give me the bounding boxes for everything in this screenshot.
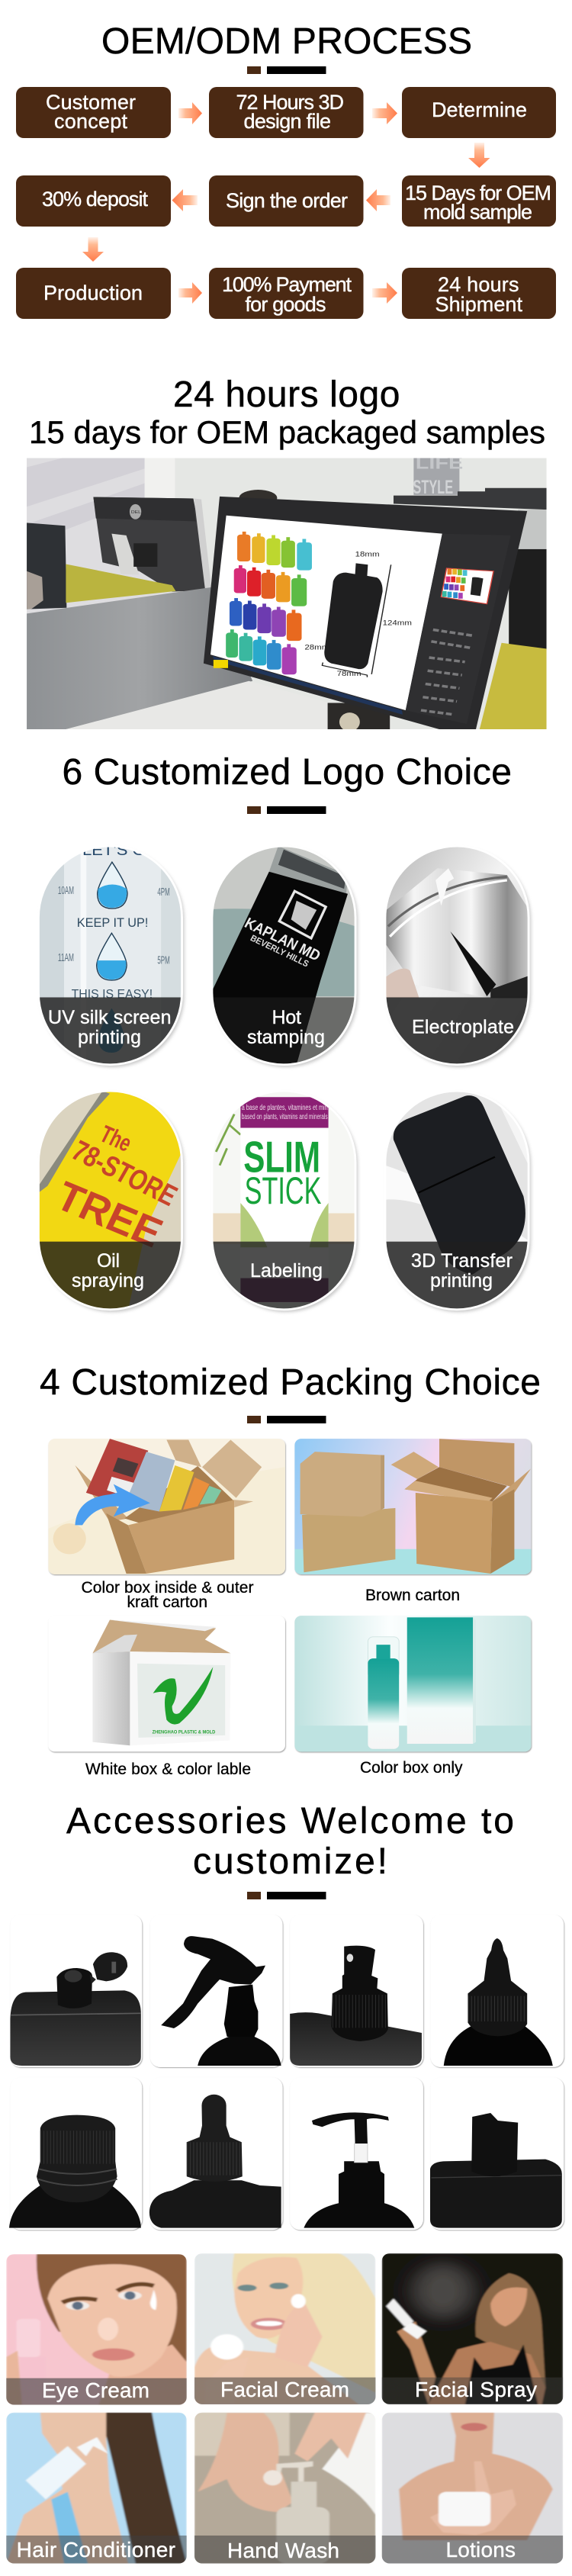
step: customer concept: [16, 87, 171, 138]
logo choices grid: [38, 841, 531, 1312]
label: oil spraying: spraying: [72, 1270, 144, 1291]
caption: white box and color label: White box & color lable: [85, 1761, 251, 1778]
label: oil spraying: [72, 1250, 144, 1291]
heading: 4 customized packing choice: 4 Customized Packing Choice: [40, 1362, 541, 1403]
label: 3D transfer printing: 3D Transfer: [411, 1250, 513, 1272]
use-case photo grid: [6, 2253, 563, 2564]
accessory: dropper: [149, 2077, 283, 2230]
label: hot stamping: stamping: [247, 1027, 325, 1048]
heading: 15 days for OEM packaged samples: 15 days for OEM packaged samples: [29, 414, 545, 450]
thumbnail panel: [441, 568, 493, 604]
heading accent bars: [247, 66, 326, 74]
pill outlines: [38, 846, 529, 1310]
photo: lotions: [382, 2413, 563, 2564]
photo: designer monitor showing colored bottles: STYLE: [413, 477, 453, 498]
arrow: sign to deposit: [172, 189, 198, 211]
photo: facial spray: [382, 2253, 563, 2404]
card: brown carton: [294, 1439, 531, 1574]
caption: color box inside and outer kraft carton: Color box inside & outer: [81, 1579, 253, 1597]
label: UV silk screen printing: printing: [78, 1027, 141, 1048]
pill image: labeled slim stick: STICK: [245, 1170, 322, 1213]
label: hand wash: Hand Wash: [227, 2539, 339, 2562]
label: UV silk screen printing: UV silk screen: [48, 1007, 171, 1028]
photo: facial cream: [194, 2253, 375, 2404]
accessory: lotion pump: [290, 2077, 423, 2230]
step: 72 hours 3D design file: 72 Hours 3D: [236, 91, 344, 114]
black bottle with dimensions: 18mm: [355, 551, 380, 558]
step: 15 days for OEM mold sample: [402, 175, 556, 227]
label: eye cream: Eye Cream: [42, 2378, 149, 2402]
accessory: twist nozzle: [430, 1915, 564, 2067]
label: electroplate: Electroplate: [412, 1016, 514, 1037]
photo: hair conditioner: [6, 2413, 187, 2564]
black bottle with dimensions: 28mm: [304, 645, 329, 651]
step: sign the order: Sign the order: [226, 189, 348, 212]
step: 30% deposit: [16, 175, 171, 227]
label: lotions: Lotions: [445, 2538, 516, 2562]
caption: brown carton: Brown carton: [365, 1587, 460, 1604]
arrow: production to payment: [178, 282, 202, 304]
pill image: UV silk screen bottle: KEEP IT UP!: [77, 915, 148, 930]
step: 15 days for OEM mold sample: 15 Days for OEM: [405, 182, 551, 204]
step: production: [16, 268, 171, 319]
heading: accessories welcome to customize: [66, 1801, 514, 1882]
pill image: 3D transfer black cap: [385, 1091, 529, 1310]
heading: accessories welcome to customize: Accessories Welcome to: [66, 1801, 514, 1841]
accessory: fine mist sprayer: [290, 1915, 423, 2067]
caption: color box only: Color box only: [360, 1759, 463, 1777]
arrow: design to determine: [372, 102, 397, 124]
step: customer concept: Customer: [46, 91, 136, 114]
step: production: Production: [43, 281, 143, 304]
label: UV silk screen printing: [48, 1007, 171, 1048]
caption: color box inside and outer kraft carton: kraft carton: [127, 1594, 207, 1611]
layers panel rows: [421, 630, 472, 715]
pill image: hot stamped black bottle: KAPLAN MD: [242, 915, 323, 964]
label: facial cream: Facial Cream: [220, 2378, 349, 2401]
step: 72 hours 3D design file: design file: [244, 110, 331, 133]
packing choices grid: [48, 1439, 531, 1778]
card: white box with color label: ZHENGHAO PLASTIC & MOLD: [153, 1730, 216, 1735]
black bottle with dimensions: 124mm: [383, 620, 412, 627]
heading accent bars: [247, 1416, 326, 1423]
process flow chart: [16, 87, 556, 319]
heading: 24 hours logo: 24 hours logo: [173, 375, 400, 415]
step: 72 hours 3D design file: [209, 87, 363, 138]
label: labeling: Labeling: [250, 1260, 323, 1282]
heading accent bars: [247, 1892, 326, 1899]
accessory: flip top cap: [10, 1915, 142, 2067]
heading: 6 customized logo choice: 6 Customized Logo Choice: [63, 752, 512, 793]
arrow: determine to mold sample: [468, 143, 490, 168]
arrow: payment to shipment: [372, 282, 397, 304]
label: facial spray: Facial Spray: [415, 2378, 537, 2401]
arrow: concept to design: [178, 102, 202, 124]
step: 15 days for OEM mold sample: mold sample: [423, 201, 532, 224]
label: oil spraying: Oil: [97, 1250, 120, 1272]
photo: eye cream: [6, 2254, 187, 2405]
pill image: UV silk screen bottle: 11AM: [58, 952, 74, 964]
photo: designer monitor showing colored bottles: [27, 452, 547, 732]
pill image: UV silk screen bottle: THIS IS EASY!: [72, 986, 153, 1001]
pill image: labeled slim stick: à base de plantes, vitamines et min: [242, 1105, 328, 1112]
caption: color box inside and outer kraft carton: [81, 1579, 253, 1611]
heading accent bars: [247, 806, 326, 814]
step: 24 hours shipment: 24 hours: [438, 273, 519, 296]
pill image: labeled slim stick: SLIM: [243, 1133, 320, 1182]
pill image: oil sprayed yellow bottle: TREE: [50, 1172, 169, 1256]
pill image: UV silk screen bottle: LET'S GO!: [82, 841, 163, 859]
photo: designer monitor showing colored bottles: DELL: [131, 510, 144, 515]
pill image: oil sprayed yellow bottle: 78-STORE: [66, 1135, 182, 1212]
label: hair conditioner: Hair Conditioner: [17, 2538, 175, 2562]
photo: hand wash: [194, 2413, 375, 2564]
step: 100% payment for goods: for goods: [246, 293, 326, 316]
pill image: hot stamped black bottle: [212, 846, 355, 1066]
pill image: UV silk screen bottle: [38, 841, 182, 1066]
pill shadows: [40, 848, 531, 1312]
label: 3D transfer printing: [411, 1250, 513, 1291]
arrow: mold sample to sign: [366, 189, 390, 211]
step: 100% payment for goods: 100% Payment: [222, 273, 352, 296]
pill image: labeled slim stick: based on plants, vitamins and minerals: [242, 1113, 328, 1121]
arrow: deposit to production: [82, 237, 104, 262]
photo: designer monitor showing colored bottles: LIFE: [416, 452, 463, 473]
card: color box in kraft carton: [48, 1439, 285, 1574]
black bottle with dimensions: 78mm: [337, 671, 362, 678]
step: 30% deposit: 30% deposit: [42, 188, 148, 211]
step: determine: Determine: [432, 98, 527, 121]
pill image: UV silk screen bottle: 5PM: [157, 955, 170, 966]
black bottle with dimensions: [304, 551, 412, 678]
accessories grid: [9, 1915, 564, 2230]
label: hot stamping: Hot: [272, 1007, 301, 1028]
step: 24 hours shipment: Shipment: [435, 293, 522, 316]
pill image: UV silk screen bottle: 4PM: [157, 886, 170, 899]
pill image: hot stamped black bottle: BEVERLY HILLS: [249, 933, 310, 969]
colored bottle grid: [226, 532, 312, 674]
pill image: oil sprayed yellow bottle: The: [96, 1121, 136, 1156]
title: OEM/ODM process: OEM/ODM PROCESS: [101, 21, 472, 62]
card: color box only: [294, 1616, 531, 1751]
step: determine: [402, 87, 556, 138]
accessory: screw cap: [9, 2077, 142, 2230]
accessory: trigger sprayer: [150, 1915, 283, 2067]
step: 24 hours shipment: [402, 268, 556, 319]
pill image: oil sprayed yellow bottle: [38, 1091, 182, 1310]
step: customer concept: concept: [54, 110, 127, 133]
label: hot stamping: [247, 1007, 325, 1048]
pill image: electroplated chrome jar: [385, 846, 529, 1066]
pill image: UV silk screen bottle: 10AM: [58, 885, 74, 897]
card: white box with color label: [48, 1616, 285, 1751]
step: sign the order: [209, 175, 363, 227]
pill image: labeled slim stick: [212, 1091, 355, 1310]
heading: accessories welcome to customize: customize!: [193, 1841, 387, 1882]
label: 3D transfer printing: printing: [430, 1270, 493, 1291]
accessory: disc cap: [430, 2077, 564, 2230]
step: 100% payment for goods: [209, 268, 363, 319]
